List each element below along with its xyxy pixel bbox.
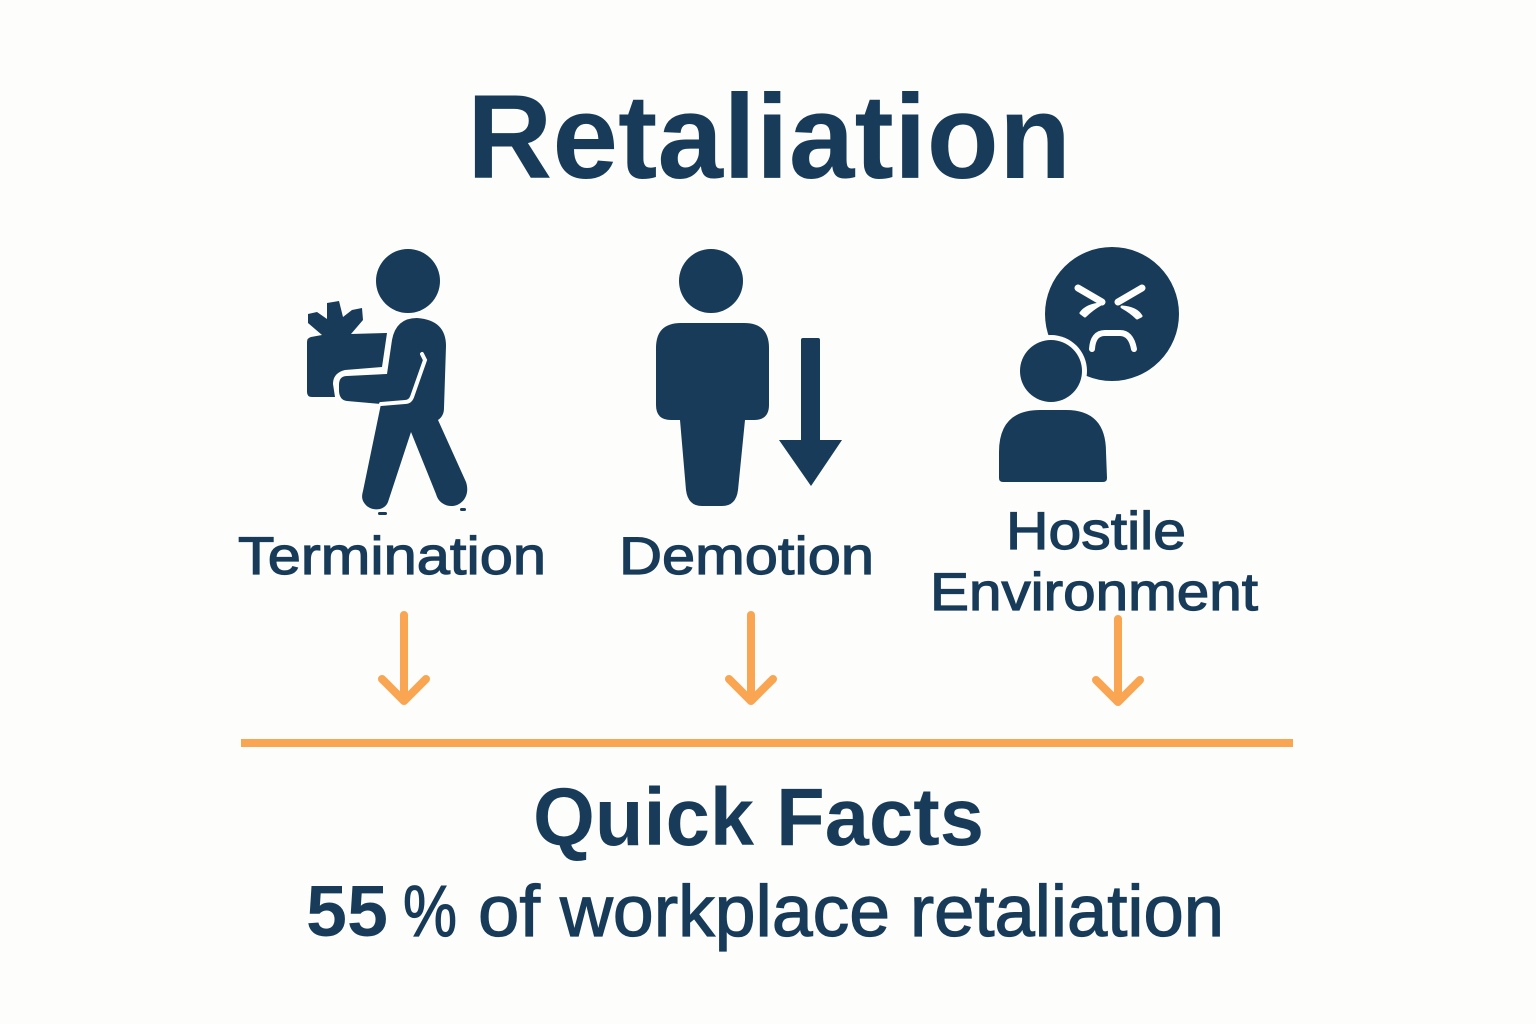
fact text	[306, 872, 1224, 952]
icon: person with angry face	[999, 247, 1179, 482]
icon: person carrying box	[307, 249, 467, 515]
arrow: termination	[382, 615, 426, 701]
fact text: 55	[306, 872, 388, 952]
title: Retaliation	[467, 70, 1071, 204]
fact text: workplace	[559, 872, 890, 952]
divider line	[241, 739, 1293, 747]
label: termination: Termination	[238, 527, 546, 586]
arrow: demotion	[729, 615, 773, 701]
label: hostile environment	[930, 502, 1258, 622]
label: demotion: Demotion	[619, 527, 874, 586]
fact text: %	[403, 872, 457, 952]
arrow: hostile environment	[1096, 619, 1140, 702]
label: hostile environment: Hostile	[1006, 502, 1186, 561]
heading: quick facts: Quick Facts	[533, 772, 984, 863]
fact text: of	[478, 872, 541, 952]
label: hostile environment: Environment	[930, 563, 1258, 622]
fact text: retaliation	[910, 872, 1224, 952]
icon: demoted person with down arrow	[656, 249, 842, 506]
